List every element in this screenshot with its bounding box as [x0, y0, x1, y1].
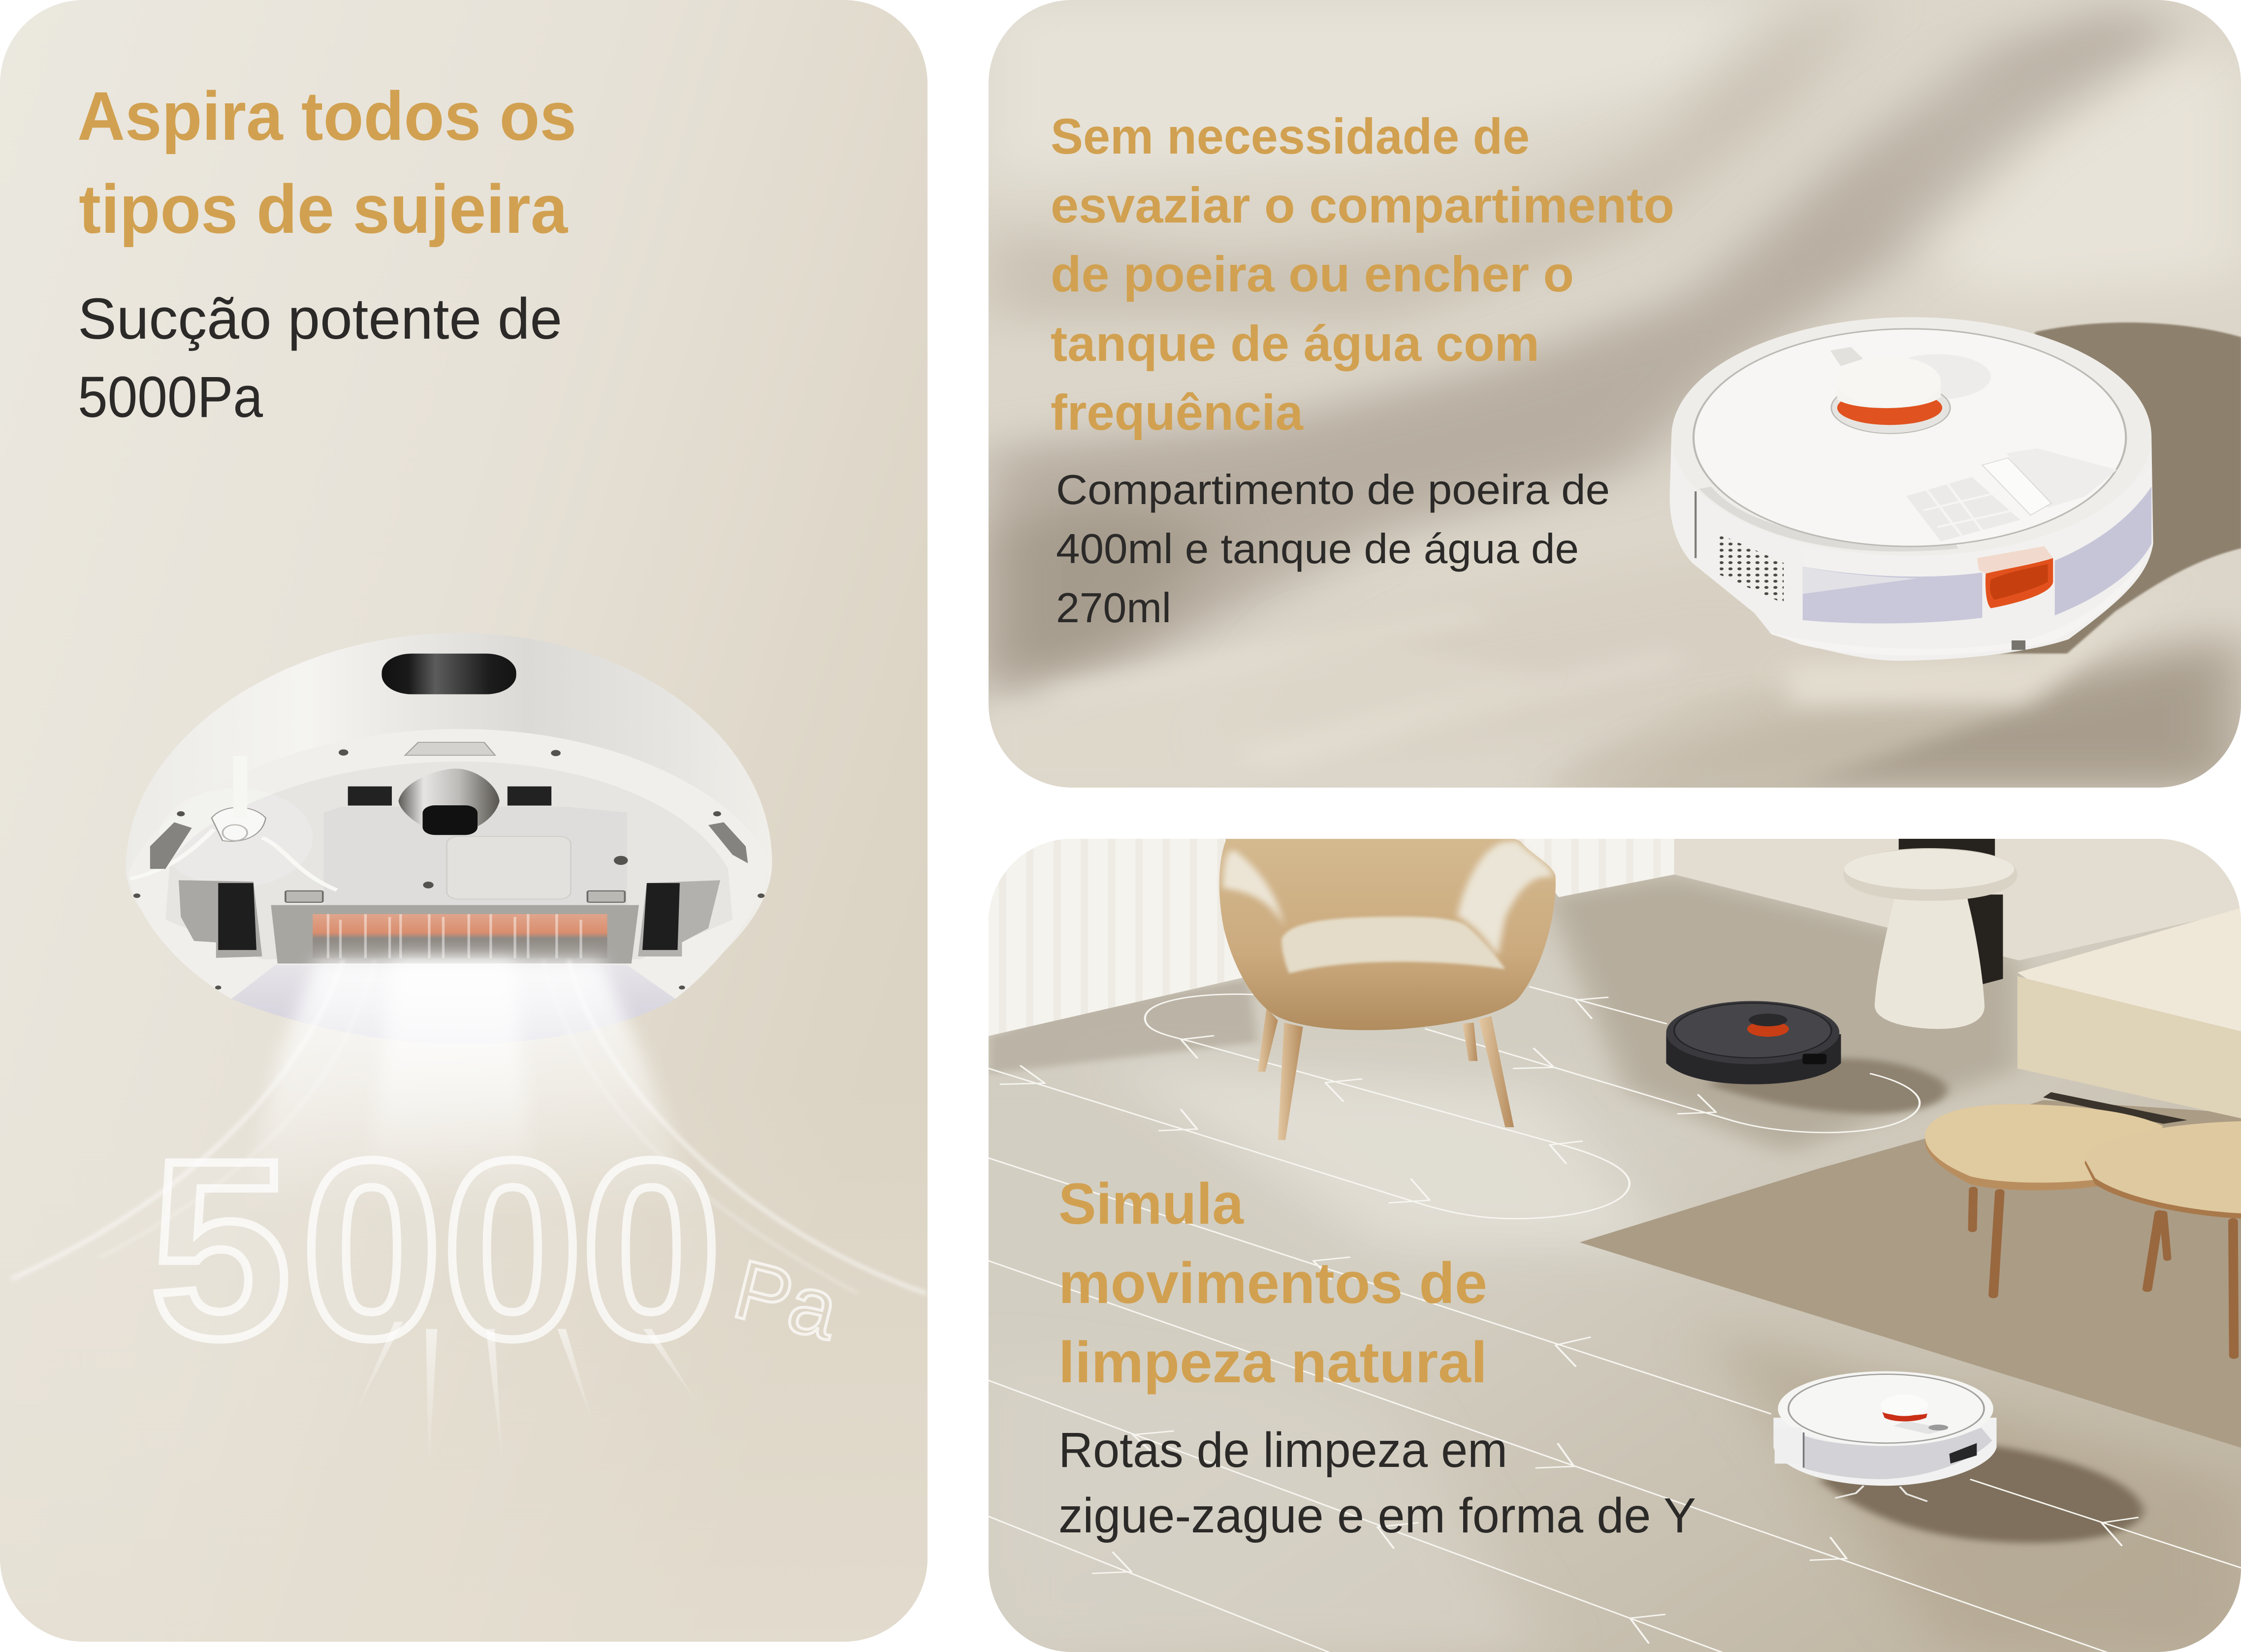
heading: Simula [1058, 1172, 1244, 1237]
illustration: robot underside [126, 633, 772, 1044]
right sensor slot [508, 787, 551, 806]
side brush [130, 756, 337, 890]
robot: top view with tank [1670, 317, 2153, 661]
smoke lettering: Pa: Pa [725, 1242, 847, 1358]
center plate [324, 807, 627, 906]
screws [133, 749, 765, 989]
description text: Sucção potente de [78, 286, 562, 351]
robot orange lidar [1882, 1412, 1927, 1421]
robot button [1928, 1425, 1948, 1430]
right clip [587, 891, 625, 902]
black robot [1666, 1001, 1841, 1084]
robot: speaker grille [1720, 534, 1784, 604]
black robot shadow [1706, 1058, 1947, 1113]
left wood table [1925, 1104, 2163, 1190]
curtain left [985, 839, 1249, 1037]
heading: frequência [1051, 384, 1304, 441]
heading: Sem necessidade de [1051, 108, 1530, 164]
dust bin [231, 965, 675, 1044]
heading: de poeira ou encher o [1051, 246, 1574, 302]
right rim mechanism [708, 822, 748, 863]
heading: tanque de água com [1051, 316, 1539, 372]
robot: orange handle [1985, 558, 2053, 608]
robot: tank light top [1803, 567, 1917, 594]
sofa [2017, 908, 2241, 1124]
description text: Rotas de limpeza em [1058, 1423, 1507, 1478]
robot: power button [1830, 347, 1863, 366]
robot: filter grid [1906, 448, 2117, 541]
chair seat [1281, 917, 1505, 974]
robot: handle recess [1990, 564, 2048, 600]
robot: orange lidar ring [1837, 391, 1942, 425]
heading: movimentos de [1058, 1251, 1487, 1316]
inner recess [165, 762, 733, 959]
description text [1058, 1423, 1696, 1543]
robot sensor window [1950, 1443, 1977, 1463]
sensor window [382, 654, 516, 694]
robot lid [1778, 1371, 1993, 1446]
heading: esvaziar o compartimento [1051, 177, 1674, 233]
robot: lid [1694, 329, 2126, 546]
left arm highlight [1222, 850, 1284, 926]
robot side panel [1775, 1428, 1802, 1463]
panel background [0, 0, 928, 1642]
left wheel [179, 880, 262, 958]
white robot shadow [1819, 1443, 2143, 1543]
robot: lidar shadow [1884, 354, 1991, 399]
panel background [989, 839, 2241, 1652]
right wheel [638, 880, 720, 956]
left rim mechanism [150, 822, 192, 869]
robot: handle surround [1977, 546, 2053, 573]
description text: 5000Pa [78, 365, 263, 430]
robot lid seam [1789, 1374, 1984, 1443]
robot: seam [1694, 491, 1697, 558]
chair legs [1258, 1008, 1514, 1140]
heading: tipos de sujeira [79, 170, 568, 248]
description text: 270ml [1056, 585, 1171, 632]
robot cast shadow [1947, 322, 2241, 654]
smoke lettering: 5000: 5000 [150, 1108, 722, 1391]
left sensor slot [348, 787, 392, 806]
bumper tab [405, 742, 495, 755]
armchair [1219, 839, 1556, 1140]
description text [78, 286, 562, 430]
description text: Compartimento de poeira de [1056, 467, 1610, 513]
table legs [1973, 1190, 2234, 1356]
robot lidar cap [1881, 1395, 1928, 1416]
white robot [1773, 1371, 1997, 1501]
robot: lidar cap [1837, 381, 1941, 408]
robot lidar shadow [1893, 1421, 1948, 1434]
panel: suction power [0, 0, 928, 1642]
robot body [1773, 1418, 1997, 1486]
roller brush [313, 914, 607, 958]
right arm highlight [1457, 841, 1553, 956]
robot: collar [1803, 468, 2151, 576]
floor shading [1546, 873, 2019, 1153]
curtain right [1514, 839, 1674, 897]
robot: tank left [1803, 567, 1982, 624]
chair shell [1219, 839, 1556, 1030]
air plume [11, 960, 926, 1472]
robot: lidar base [1831, 382, 1950, 434]
robot seam [1802, 1432, 1806, 1468]
robot front band [1804, 1428, 1992, 1479]
panel: dust bin and water tank [985, 0, 2241, 791]
panel: natural cleaning movement [985, 839, 2241, 1652]
black stand [1899, 839, 2003, 984]
caster wheel dome [398, 768, 500, 832]
robot: body [1670, 437, 2153, 661]
heading [1058, 1172, 1487, 1395]
brush frame [271, 905, 639, 963]
robot: rim [1671, 317, 2151, 556]
side table [1843, 848, 2017, 1029]
description text: zigue-zague e em forma de Y [1058, 1488, 1696, 1543]
panel background [989, 0, 2241, 788]
living room scene [985, 839, 2241, 1652]
right wood table [2085, 1121, 2241, 1219]
underside face rim [128, 729, 770, 999]
robot: tank base band [1768, 558, 2145, 655]
robot side brushes [1835, 1486, 1927, 1501]
robot: rim lower shade [1699, 486, 1958, 551]
robot: wheel clip [2012, 640, 2025, 650]
heading [1051, 108, 1674, 441]
heading: limpeza natural [1058, 1330, 1487, 1395]
sunlight and shadow carpet [985, 0, 2241, 791]
description text [1056, 467, 1610, 632]
rug [1579, 1100, 2241, 1448]
robot: tank right [2055, 486, 2151, 615]
description text: 400ml e tanque de água de [1056, 526, 1579, 572]
cleaning path lines [989, 987, 2241, 1652]
heading [77, 77, 576, 248]
caster wheel tire [422, 805, 478, 835]
access panel [447, 836, 571, 899]
left clip [286, 891, 323, 902]
wall [1674, 839, 2241, 960]
heading: Aspira todos os [77, 77, 576, 155]
robot body shell [126, 633, 772, 1044]
